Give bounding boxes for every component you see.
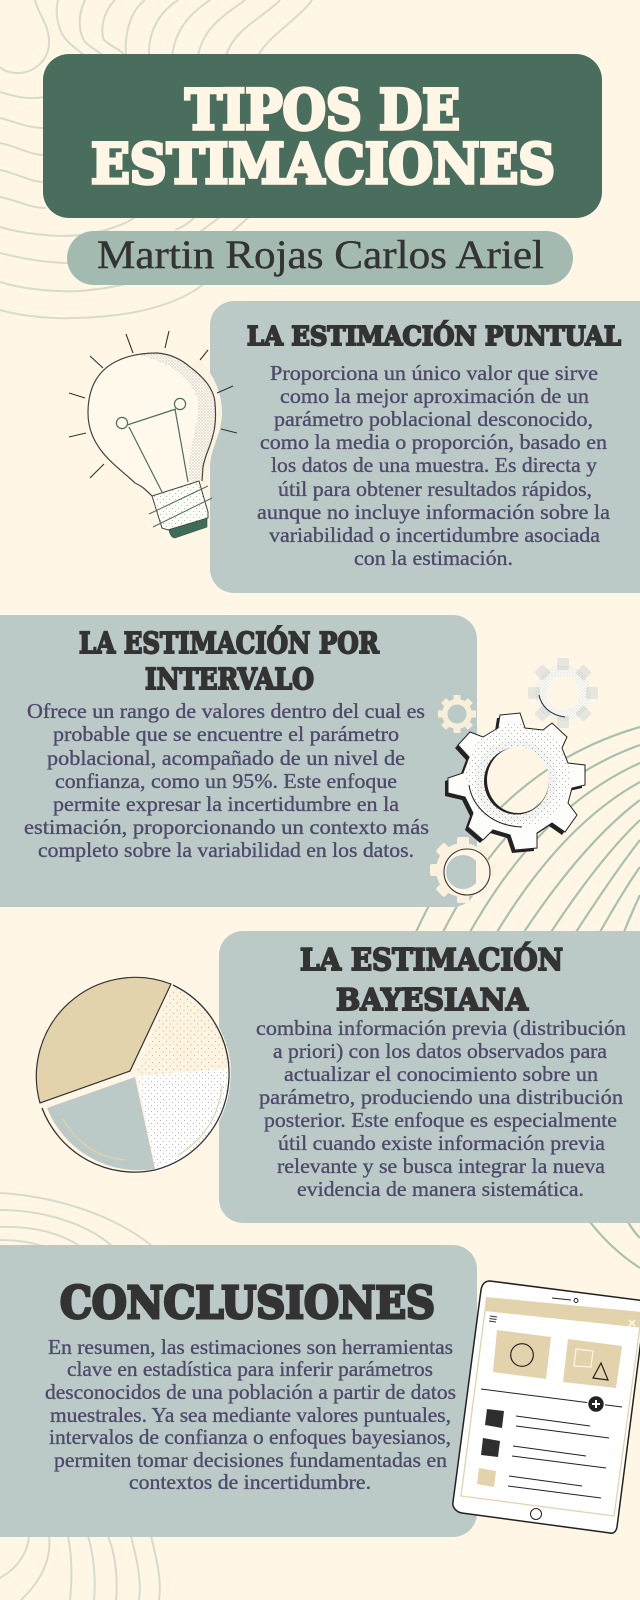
tablet body [453, 1281, 640, 1533]
icon: gears [430, 658, 598, 903]
body text [257, 361, 611, 570]
title text: TIPOS DE [185, 77, 460, 142]
heading: LA ESTIMACIÓN PUNTUAL [247, 320, 621, 352]
heading [79, 625, 380, 696]
curves: lower right [590, 1222, 640, 1268]
icon: light bulb [69, 331, 237, 538]
body text [24, 699, 429, 862]
body text: parámetro, produciendo una distribución [259, 1085, 624, 1109]
panel: estimacion puntual [210, 301, 640, 593]
body text: combina información previa (distribución [256, 1016, 627, 1040]
row 2 [481, 1438, 500, 1457]
body text: permiten tomar decisiones fundamentadas en [54, 1448, 448, 1472]
camera [552, 1298, 571, 1300]
card: square and triangle [563, 1339, 622, 1388]
body text: relevante y se busca integrar la nueva [277, 1154, 606, 1178]
body text: evidencia de manera sistemática. [297, 1177, 584, 1201]
tablet screen [461, 1311, 640, 1516]
big gear [445, 712, 586, 853]
slice: dotted cream [135, 985, 231, 1076]
contour lines: top left [0, 0, 312, 318]
arcs: right side behind gears [416, 727, 640, 932]
panel: estimacion bayesiana [219, 931, 640, 1223]
body text: clave en estadística para inferir parámetros [67, 1357, 433, 1381]
divider with plus button [481, 1389, 622, 1407]
bulb cap [169, 518, 207, 538]
body text: Ofrece un rango de valores dentro del cual es [27, 699, 425, 723]
slice: blue grey [47, 1077, 155, 1170]
body text: desconocidos de una población a partir de datos [45, 1380, 456, 1404]
body text: Proporciona un único valor que sirve [270, 361, 598, 385]
heading [300, 942, 563, 1018]
row 3 [477, 1468, 496, 1487]
small gear top right [528, 658, 598, 728]
bulb base [152, 481, 208, 530]
slice: tan [36, 977, 171, 1103]
body text: útil cuando existe información previa [278, 1131, 606, 1155]
body text: En resumen, las estimaciones son herramientas [48, 1335, 453, 1359]
heading: LA ESTIMACIÓN POR [79, 625, 380, 660]
body text: a priori) con los datos observados para [273, 1039, 608, 1063]
body text: confianza, como un 95%. Este enfoque [55, 769, 397, 793]
heading: LA ESTIMACIÓN [300, 942, 563, 978]
body text: variabilidad o incertidumbre asociada [269, 523, 601, 547]
body text: aunque no incluye información sobre la [257, 500, 611, 524]
body text: los datos de una muestra. Es directa y [271, 453, 598, 477]
body text: probable que se encuentre el parámetro [53, 722, 399, 746]
pie chart [36, 977, 231, 1172]
contour lines: bottom left [0, 1536, 160, 1600]
body text: contextos de incertidumbre. [129, 1470, 371, 1494]
body text: estimación, proporcionando un contexto más [24, 815, 429, 839]
home button [530, 1508, 542, 1520]
panel: conclusiones [0, 1245, 477, 1537]
body text: útil para obtener resultados rápidos, [278, 477, 592, 501]
author pill [67, 231, 573, 285]
body text: con la estimación. [354, 546, 513, 570]
body text: como la media o proporción, basado en [260, 430, 608, 454]
body text: permite expresar la incertidumbre en la [53, 792, 400, 816]
panel: estimacion por intervalo [0, 615, 477, 907]
heading: INTERVALO [145, 662, 314, 696]
body text: como la mejor aproximación de un [280, 384, 590, 408]
body text: muestrales. Ya sea mediante valores puntuales, [50, 1403, 451, 1427]
pie halo [155, 983, 231, 1172]
icon: tablet [453, 1281, 640, 1533]
small cream gear [438, 695, 476, 733]
heading: CONCLUSIONES [60, 1278, 435, 1329]
title text: ESTIMACIONES [91, 131, 555, 196]
body text: completo sobre la variabilidad en los datos. [38, 838, 414, 862]
row 1 [485, 1409, 504, 1428]
body text [256, 1016, 627, 1201]
heading: BAYESIANA [336, 983, 529, 1018]
body text: posterior. Este enfoque es especialmente [264, 1108, 617, 1132]
title text [91, 77, 555, 196]
body text: intervalos de confianza o enfoques bayesianos, [49, 1425, 451, 1449]
contour lines: middle left [0, 1193, 152, 1246]
title panel [43, 54, 602, 218]
bulb rays [69, 331, 237, 478]
bulb halo [190, 360, 222, 482]
bottom cream gear [430, 837, 496, 903]
body text: parámetro poblacional desconocido, [274, 407, 593, 431]
screen header [484, 1297, 640, 1328]
card: circle [493, 1330, 551, 1379]
body text: poblacional, acompañado de un nivel de [47, 746, 405, 770]
body text: actualizar el conocimiento sobre un [284, 1062, 599, 1086]
author pill: Martin Rojas Carlos Ariel [97, 232, 544, 277]
slice: dotted white [138, 1069, 228, 1167]
body text [45, 1335, 456, 1494]
